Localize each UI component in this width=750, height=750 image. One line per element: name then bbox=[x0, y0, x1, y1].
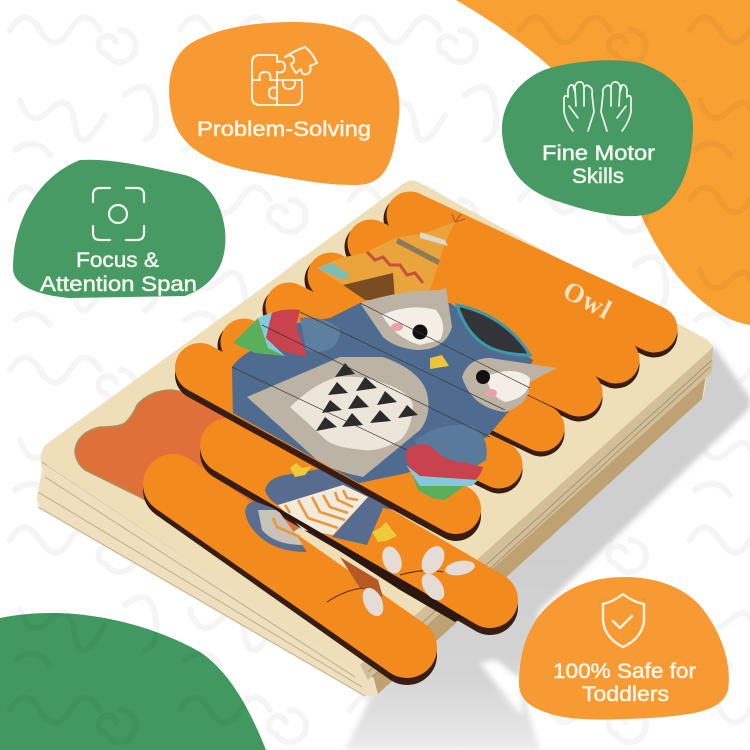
right wing watermelon bbox=[406, 425, 487, 500]
badge: 100% Safe for Toddlers bbox=[519, 577, 729, 720]
upper layers right side bbox=[360, 347, 713, 680]
right hand bbox=[601, 82, 631, 131]
text: Problem-Solving: Problem-Solving bbox=[197, 118, 371, 141]
owl lower body bbox=[228, 463, 476, 622]
green corner shape bottom left bbox=[0, 613, 266, 750]
text: Attention Span: Attention Span bbox=[40, 273, 197, 296]
strip 2 bbox=[368, 243, 616, 365]
strip 1 bbox=[407, 215, 654, 334]
strip 3 bbox=[328, 276, 579, 398]
white band bbox=[420, 232, 448, 246]
left owl head bbox=[360, 288, 452, 350]
window light patch bbox=[480, 660, 522, 716]
strip 5 bbox=[241, 342, 499, 470]
feather branch left bbox=[327, 585, 387, 619]
door bbox=[343, 273, 395, 300]
icon: shield bbox=[603, 594, 644, 647]
strip 7 bbox=[228, 446, 490, 607]
icon: focus frame bbox=[93, 188, 144, 240]
strip 4 bbox=[286, 306, 541, 433]
badge: Fine Motor Skills bbox=[502, 60, 693, 216]
text: Toddlers: Toddlers bbox=[582, 683, 669, 706]
icon: puzzle bbox=[252, 47, 317, 105]
badge: Problem-Solving bbox=[169, 22, 399, 185]
left wing watermelon bbox=[265, 309, 307, 357]
blue arch bbox=[245, 501, 307, 552]
belly bbox=[247, 357, 428, 477]
beak bbox=[430, 355, 449, 369]
text: Fine Motor: Fine Motor bbox=[542, 142, 655, 165]
text: 100% Safe for: 100% Safe for bbox=[553, 660, 696, 683]
tail bbox=[340, 557, 383, 597]
chevrons bbox=[273, 490, 358, 537]
chevron panel bbox=[278, 485, 368, 535]
teal band bbox=[317, 263, 350, 280]
slit under strip 7 bbox=[228, 479, 463, 622]
icon: hands bbox=[564, 82, 631, 131]
text: Skills: Skills bbox=[572, 165, 624, 188]
lower board right side bbox=[372, 375, 706, 694]
owl upper body bbox=[232, 288, 557, 500]
blue torso bbox=[265, 466, 420, 545]
zigzag bbox=[367, 252, 423, 283]
strip 8 bbox=[173, 484, 407, 655]
dark tail arc bbox=[457, 305, 530, 355]
teepee illustration bbox=[317, 214, 465, 300]
yellow foot left bbox=[290, 463, 312, 477]
layer lines left side bbox=[38, 462, 365, 696]
gray band bbox=[396, 238, 440, 265]
puzzle strips upper bbox=[173, 215, 654, 655]
label: Owl: Owl bbox=[558, 275, 617, 325]
strip 6 bbox=[200, 368, 456, 516]
text: Focus &: Focus & bbox=[76, 249, 159, 272]
badge: Focus and Attention Span bbox=[13, 160, 225, 298]
owl body bbox=[232, 303, 533, 485]
strip seams bbox=[232, 303, 530, 450]
board silhouette bbox=[37, 180, 713, 696]
tray recess bbox=[75, 390, 340, 560]
feathers branch right bbox=[379, 542, 476, 604]
wooden board stack bbox=[37, 180, 713, 696]
board shadow bbox=[345, 345, 750, 750]
tray top face bbox=[43, 180, 711, 666]
yellow foot right bbox=[372, 522, 397, 542]
right owl head bbox=[462, 358, 557, 412]
orange corner shape top right bbox=[456, 0, 750, 325]
belly triangles bbox=[316, 363, 418, 431]
left hand bbox=[564, 82, 594, 131]
